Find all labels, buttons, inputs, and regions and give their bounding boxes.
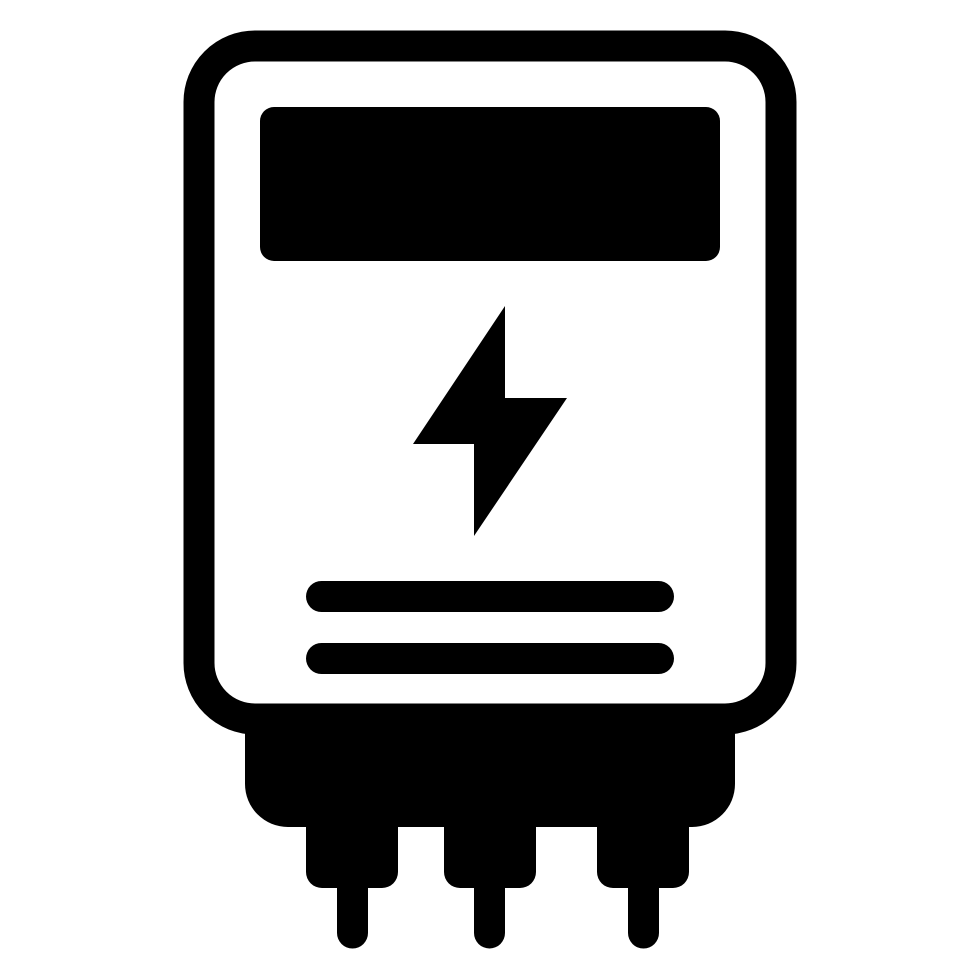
middle connector [444,820,536,948]
left connector [306,820,398,948]
terminal block [245,725,735,827]
display screen [260,107,720,261]
label line lower [306,643,674,674]
right connector [597,820,689,948]
lightning bolt [413,306,567,536]
label line upper [306,581,674,612]
meter body outline [199,46,781,719]
